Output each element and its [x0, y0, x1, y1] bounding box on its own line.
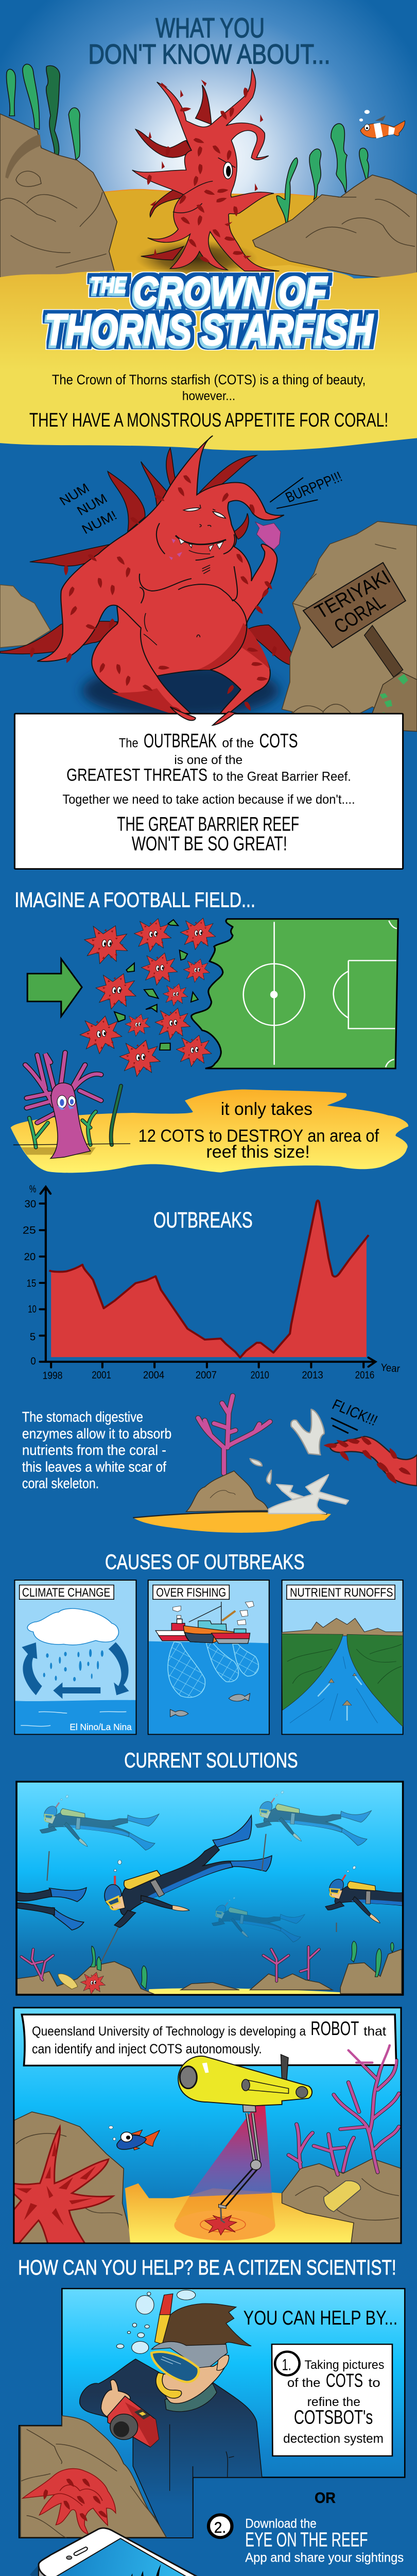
- chart title: OUTBREAKS: [153, 1208, 253, 1232]
- y axis labels: 25: [23, 1225, 36, 1236]
- step 2 badge: [208, 2515, 232, 2537]
- callout: taking pictures: COTSBOT's: [294, 2406, 373, 2428]
- panel: robot: [13, 2008, 402, 2244]
- beam: [189, 2106, 272, 2197]
- text: stomach digestive enzymes: The stomach digestive: [22, 1409, 143, 1425]
- coral tip over box: [347, 2044, 397, 2066]
- target spot: [174, 2210, 275, 2241]
- title: the crown of thorns starfish: CROWN OF: [133, 268, 328, 314]
- outbreak sentence: Together we need to take action because if we don't....: [62, 793, 355, 807]
- heading: what you don't know about: DON'T KNOW ABOUT...: [89, 39, 331, 70]
- star shadow: [82, 664, 279, 718]
- panel: hero reef scene: [0, 0, 417, 451]
- download text: Download the: [245, 2517, 317, 2531]
- outbreak sentence: GREATEST THREATS: [66, 765, 207, 785]
- illustration: cotsbot robot: [178, 2055, 312, 2223]
- illustration: flicking arm: [324, 1435, 417, 1486]
- download text: [245, 2517, 404, 2565]
- illustration: fat starfish: [0, 436, 292, 725]
- flick text: FLICK!!!: [329, 1396, 380, 1429]
- nets: [168, 1642, 258, 1698]
- hair: [162, 2303, 251, 2360]
- panel: divers: [15, 1781, 404, 1996]
- text: stomach digestive enzymes: coral skeleton.: [22, 1476, 99, 1492]
- text: it only takes: reef this size!: [206, 1142, 310, 1162]
- num num num text: NUM!: [80, 509, 119, 537]
- mountains: [282, 1618, 403, 1636]
- fish: [170, 1693, 250, 1717]
- box text: [32, 2018, 386, 2056]
- callout: taking pictures: dectection system: [283, 2432, 384, 2446]
- text: stomach digestive enzymes: [22, 1409, 171, 1492]
- near sand: [0, 265, 417, 451]
- panel: nutrient runoffs: [282, 1580, 403, 1734]
- box text: Queensland University of Technology is developing a: [32, 2025, 306, 2039]
- text: it only takes: [138, 1099, 379, 1162]
- fish: [109, 2126, 160, 2150]
- illustration: teriyaki coral sign: CORAL: [330, 591, 389, 638]
- river detail: [290, 1656, 378, 1723]
- rock right: [253, 175, 417, 278]
- outbreak sentence: WON'T BE SO GREAT!: [132, 832, 287, 855]
- title: the crown of thorns starfish: [45, 268, 374, 354]
- area: [51, 1200, 367, 1358]
- illustration: teriyaki coral sign: TERIYAKI: [311, 566, 394, 623]
- x axis labels: 2016: [355, 1369, 374, 1381]
- outbreak sentence: OUTBREAK: [144, 730, 217, 752]
- pink corals: [289, 2045, 399, 2175]
- step 2 badge: 2.: [214, 2519, 226, 2536]
- callout: taking pictures: refine the: [307, 2395, 360, 2409]
- x axis labels: 2004: [143, 1369, 164, 1381]
- neck collar: [165, 2384, 217, 2412]
- illustration: coral on rock: [133, 1396, 331, 1533]
- boat smoke: [173, 1601, 254, 1625]
- heading: imagine a football field: IMAGINE A FOOTBALL FIELD...: [14, 888, 255, 912]
- num num num text: NUM: [75, 492, 110, 518]
- text: it only takes: it only takes: [221, 1099, 312, 1119]
- label: CLIMATE CHANGE: [22, 1586, 110, 1600]
- y axis labels: 5: [30, 1331, 36, 1343]
- rock cracks: [16, 2133, 399, 2220]
- panel: citizen scientist: [19, 2289, 405, 2538]
- starfish on rock: [23, 2469, 116, 2534]
- callout: taking pictures: Taking pictures: [305, 2358, 384, 2372]
- cloud: [27, 1608, 118, 1645]
- bubbles: [116, 2290, 196, 2353]
- text: stomach digestive enzymes: nutrients from the coral -: [22, 1443, 166, 1459]
- sea sponge: [324, 2181, 360, 2212]
- right rock: [282, 2159, 402, 2244]
- x axis labels: 2007: [196, 1369, 217, 1381]
- rock with starfish: [21, 2416, 166, 2537]
- x axis labels: 2013: [302, 1369, 323, 1381]
- illustration: smartphone: [30, 2528, 259, 2576]
- coral in hand: [255, 522, 281, 550]
- y axis labels: [23, 1183, 37, 1367]
- star feet over panel: [170, 707, 235, 725]
- eye logo: [116, 2564, 171, 2576]
- starfish on rock: [13, 2127, 113, 2244]
- num num num text: [57, 481, 119, 537]
- swarm of starfish: [78, 918, 216, 1077]
- x axis labels: Year: [380, 1362, 401, 1375]
- outbreak sentence: THE GREAT BARRIER REEF: [117, 812, 299, 835]
- divers: [16, 1762, 417, 1968]
- y axis labels: 30: [25, 1198, 36, 1210]
- y axis labels: 20: [24, 1251, 36, 1263]
- heading: what you don't know about: WHAT YOU: [155, 13, 265, 43]
- outbreak sentence: is one of the: [174, 753, 242, 767]
- mask: [151, 2342, 228, 2382]
- x axis labels: 2010: [251, 1369, 269, 1381]
- seaweed left: [7, 64, 80, 160]
- x axis labels: 2001: [92, 1369, 111, 1381]
- num num num text: NUM: [57, 481, 92, 509]
- heading: what you don't know about: [89, 13, 331, 70]
- text: stomach digestive enzymes: this leaves a white scar of: [22, 1459, 167, 1475]
- panel: over fishing: [148, 1580, 269, 1734]
- heading: current solutions: CURRENT SOLUTIONS: [124, 1749, 298, 1772]
- panel: climate change: [14, 1580, 136, 1734]
- panel: outbreaks area chart: [23, 1183, 401, 1381]
- water cycle arrows: [22, 1642, 129, 1699]
- el nino la nina: El Nino/La Nina: [70, 1722, 132, 1732]
- small rock with algae: [371, 672, 417, 732]
- green land: [282, 1634, 403, 1727]
- y axis labels: %: [29, 1183, 36, 1195]
- seabed: [16, 1941, 402, 1994]
- shadow under starfish: [135, 240, 258, 277]
- outbreak sentence: to the Great Barrier Reef.: [213, 770, 351, 784]
- football field: [192, 919, 398, 1069]
- rain: [43, 1649, 103, 1682]
- rock left: [0, 114, 117, 278]
- callout: taking pictures: 1.: [282, 2355, 291, 2374]
- y axis labels: 10: [28, 1303, 37, 1315]
- illustration: teriyaki coral sign: [303, 563, 406, 677]
- x axis labels: [43, 1362, 401, 1381]
- illustration: crown of thorns starfish: [132, 69, 279, 271]
- sand: [125, 2183, 354, 2244]
- callout: taking pictures: COTS: [326, 2370, 363, 2392]
- diver body: [80, 2359, 262, 2538]
- illustration: dead white coral: [250, 1409, 349, 1514]
- burp text: BURPPP!!!: [283, 469, 345, 506]
- or: OR: [315, 2490, 336, 2506]
- outline: [49, 1200, 369, 1358]
- illustration: clownfish: [359, 110, 405, 139]
- outbreak sentence: [62, 730, 355, 855]
- sky glow background: [0, 0, 417, 296]
- callout: taking pictures: of the: [287, 2376, 321, 2390]
- text: stomach digestive enzymes: enzymes allow it to absorb: [22, 1426, 171, 1442]
- face: [160, 2355, 229, 2403]
- callout: taking pictures: [272, 2344, 392, 2456]
- seaweed right: [276, 124, 369, 226]
- panel: outbreak message: [14, 714, 403, 869]
- fishing boats: [155, 1602, 250, 1643]
- rock right: [282, 521, 417, 732]
- callout: taking pictures: to: [368, 2376, 380, 2390]
- frame: [16, 1782, 403, 1995]
- outbreak sentence: of the: [222, 737, 254, 750]
- y axis labels: 0: [30, 1355, 36, 1367]
- arrow: [27, 959, 82, 1016]
- label: OVER FISHING: [156, 1586, 226, 1600]
- box text: ROBOT: [310, 2018, 359, 2040]
- box text: can identify and inject COTS autonomously.: [32, 2041, 262, 2056]
- starfish target: [205, 2215, 237, 2235]
- outbreak sentence: The: [119, 737, 138, 750]
- heading: causes of outbreaks: CAUSES OF OUTBREAKS: [105, 1550, 305, 1574]
- sand island: [11, 1090, 408, 1173]
- box text: that: [363, 2025, 386, 2039]
- hand and camera: [101, 2380, 159, 2447]
- burp text: [270, 469, 345, 509]
- x axis labels: 1998: [43, 1370, 62, 1381]
- ear: [217, 2355, 229, 2370]
- snorkel: [155, 2294, 182, 2398]
- field chunks: [114, 920, 198, 1050]
- illustration: sad coral: [13, 1053, 130, 1159]
- intro text: however: however...: [182, 389, 235, 403]
- islands: [329, 1673, 356, 1705]
- left rock: [14, 2112, 133, 2244]
- axes: [40, 1187, 375, 1367]
- y axis labels: 15: [27, 1278, 36, 1290]
- text box: [22, 2014, 396, 2065]
- rock details: [290, 544, 396, 727]
- title: the crown of thorns starfish: THE: [91, 273, 127, 298]
- rock left: [0, 585, 50, 648]
- outbreak sentence: COTS: [259, 730, 298, 752]
- far sand: [101, 190, 327, 283]
